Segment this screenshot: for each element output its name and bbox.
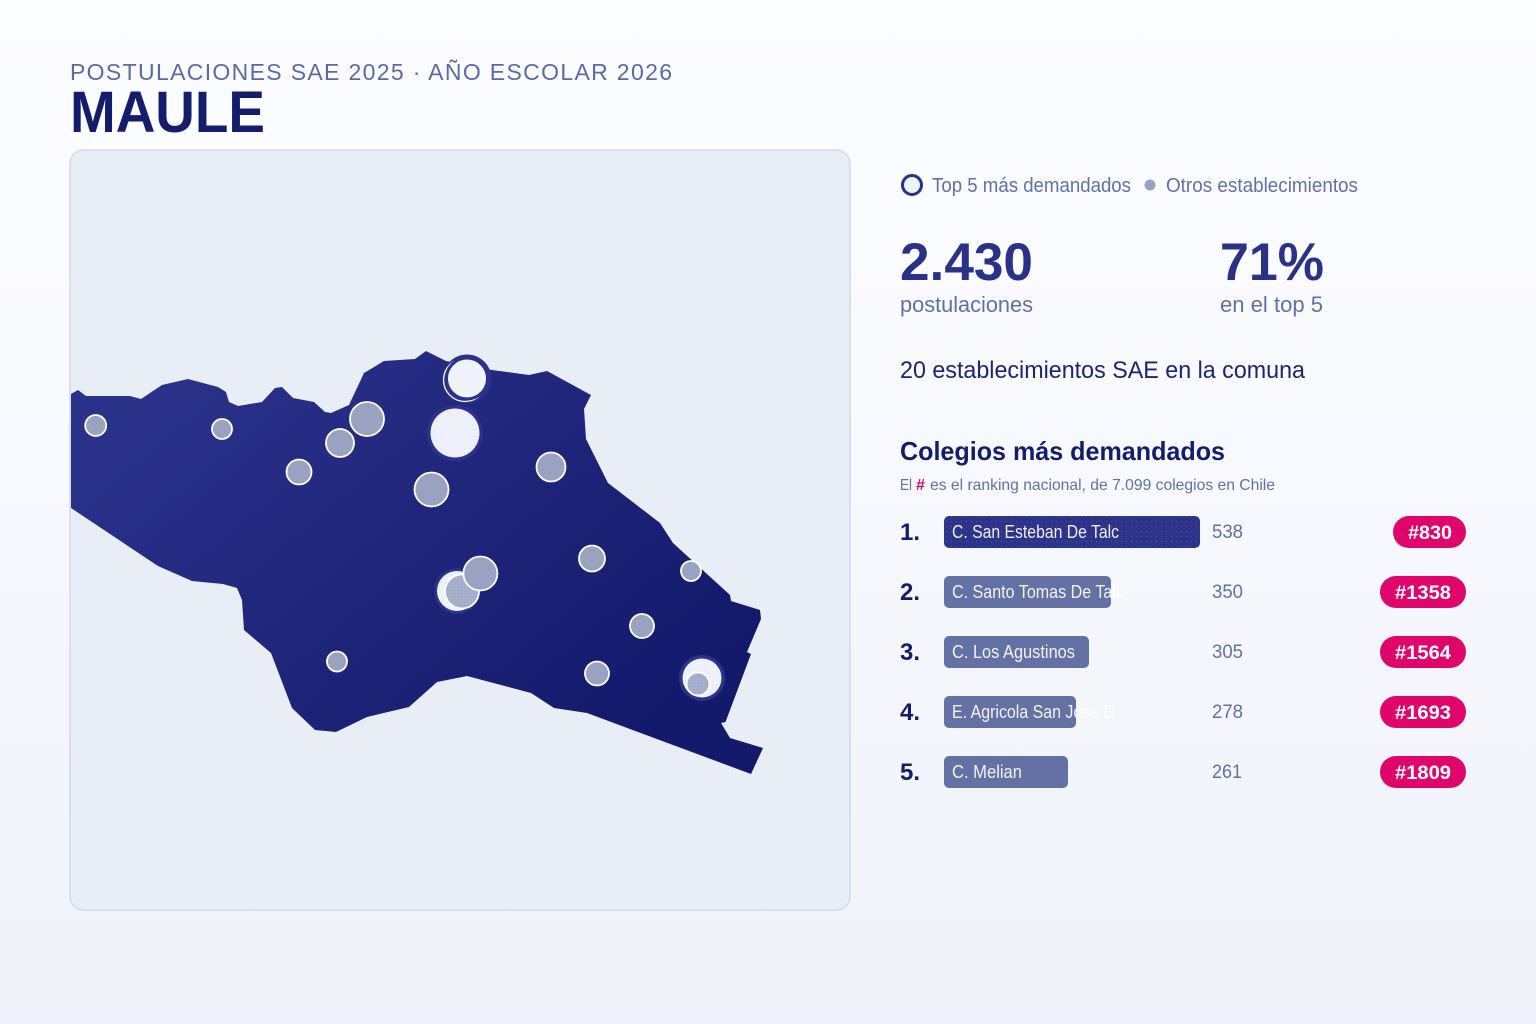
text: school count: 20 establecimientos SAE en la comuna bbox=[900, 357, 1306, 384]
ranking badge: #1693 bbox=[1395, 703, 1451, 724]
eyebrow text: POSTULACIONES SAE 2025 · AÑO ESCOLAR 2026 bbox=[70, 59, 672, 85]
top 5 marker: center north bbox=[427, 405, 483, 461]
rank number: 2. bbox=[900, 579, 920, 606]
title: MAULE bbox=[70, 80, 265, 145]
stat: top 5 share bbox=[1220, 233, 1324, 317]
ranking badge bbox=[1380, 756, 1466, 788]
ranking badge: #1809 bbox=[1395, 763, 1451, 784]
bar bbox=[944, 756, 1068, 788]
bar label: C. Melian bbox=[952, 762, 1022, 782]
legend icon: top 5 ring bbox=[902, 176, 922, 194]
value: 305 bbox=[1212, 642, 1243, 663]
ranking row 2 bbox=[900, 576, 1466, 608]
bar label: C. San Esteban De Talc bbox=[952, 522, 1119, 542]
legend label: top 5: Top 5 más demandados bbox=[932, 175, 1131, 197]
bar bbox=[944, 696, 1076, 728]
ranking badge: #830 bbox=[1408, 523, 1452, 544]
bar label: C. Los Agustinos bbox=[952, 642, 1075, 662]
ranking badge: #1358 bbox=[1395, 583, 1451, 604]
ranking badge bbox=[1380, 696, 1466, 728]
map frame bbox=[70, 150, 850, 910]
ranking note: es el ranking nacional, de 7.099 colegios en Chile bbox=[930, 477, 1275, 494]
bar label: C. Santo Tomas De Talc bbox=[952, 582, 1124, 602]
ranking note: # bbox=[916, 477, 925, 494]
ranking row 1 bbox=[900, 516, 1466, 548]
ranking row 5 bbox=[900, 756, 1466, 788]
legend bbox=[902, 175, 1358, 197]
bar bbox=[944, 636, 1089, 668]
bar bbox=[944, 576, 1111, 608]
rank number: 4. bbox=[900, 699, 920, 726]
value: 350 bbox=[1212, 582, 1243, 603]
school marker overlapping bbox=[463, 556, 497, 590]
stat value: 2.430 bbox=[900, 233, 1033, 292]
rank number: 3. bbox=[900, 639, 920, 666]
ranking heading: Colegios más demandados bbox=[900, 436, 1225, 466]
stat label: postulaciones bbox=[900, 292, 1033, 317]
top 5 marker: north bbox=[442, 354, 492, 404]
panel: map bbox=[70, 150, 850, 910]
value: 278 bbox=[1212, 702, 1243, 723]
value: 538 bbox=[1212, 522, 1243, 543]
ranking row 4 bbox=[900, 696, 1466, 728]
bar bbox=[944, 516, 1200, 548]
ranking badge bbox=[1393, 516, 1466, 548]
rank number: 5. bbox=[900, 759, 920, 786]
stat value: 71% bbox=[1220, 233, 1324, 292]
ranking row 3 bbox=[900, 636, 1466, 668]
rank number: 1. bbox=[900, 519, 920, 546]
value: 261 bbox=[1212, 762, 1242, 783]
top 5 marker: center south bbox=[434, 568, 480, 614]
region shape: Maule bbox=[71, 351, 763, 774]
other schools markers bbox=[85, 402, 701, 686]
ranking note: El bbox=[900, 477, 912, 494]
top 5 marker: south east bbox=[679, 655, 725, 701]
ranking badge bbox=[1380, 576, 1466, 608]
ranking badge bbox=[1380, 636, 1466, 668]
stat label: en el top 5 bbox=[1220, 292, 1323, 317]
header bbox=[70, 59, 672, 145]
legend icon: other dot bbox=[1144, 180, 1156, 190]
ranking badge: #1564 bbox=[1395, 643, 1451, 664]
bar label: E. Agricola San Jose D bbox=[952, 702, 1115, 722]
legend label: others: Otros establecimientos bbox=[1166, 175, 1358, 197]
stat: applications bbox=[900, 233, 1033, 317]
